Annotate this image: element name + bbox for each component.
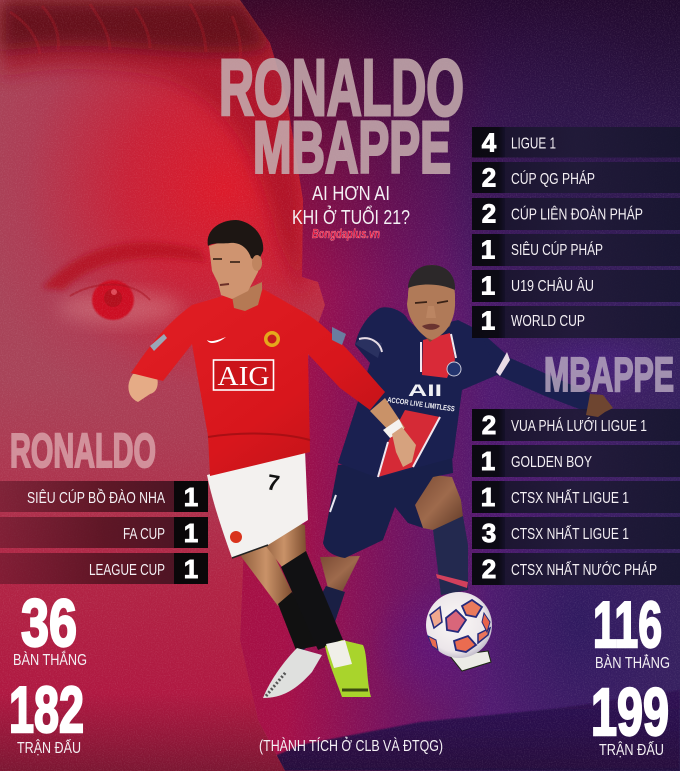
Ronaldo rear leg and white boot xyxy=(240,543,322,698)
Mbappe head xyxy=(407,265,455,340)
row: CTSX Nuoc Phap xyxy=(472,553,680,585)
Mbappe sock xyxy=(433,516,468,595)
footnote: (THÀNH TÍCH Ở CLB VÀ ĐTQG) xyxy=(259,737,443,755)
Ronaldo player cutout xyxy=(128,220,416,698)
row: World Cup: WORLD CUP xyxy=(511,313,585,330)
Ronaldo wristband xyxy=(383,419,404,438)
Manchester United crest xyxy=(264,331,280,347)
Ronaldo green boot xyxy=(325,640,371,697)
jersey sponsor: ACCOR LIVE LIMITLESS xyxy=(387,395,455,413)
row: Sieu Cup Bo Dao Nha: 1 xyxy=(184,482,198,512)
jersey sponsor xyxy=(387,381,455,413)
stat: Ronaldo goals: 36 xyxy=(21,586,77,661)
row: Golden Boy xyxy=(472,445,680,477)
stat: Mbappe matches: TRẬN ĐẤU xyxy=(599,742,664,759)
row: FA Cup: 1 xyxy=(184,518,198,548)
Mbappe right leg xyxy=(415,475,463,530)
Mbappe extended arm xyxy=(481,332,590,412)
Ronaldo black sock xyxy=(281,551,343,650)
source logo: Bongdaplus.vn xyxy=(312,227,380,241)
row: FA Cup: FA CUP xyxy=(123,526,165,543)
subtitle xyxy=(292,183,410,229)
row: U19 Chau Au xyxy=(472,270,680,302)
Ronaldo red jersey xyxy=(131,289,385,476)
stat: Ronaldo goals: BÀN THẮNG xyxy=(13,651,87,669)
Ronaldo forearm xyxy=(370,398,405,434)
Ronaldo left hand xyxy=(128,372,158,402)
Mbappe neck xyxy=(414,316,452,342)
row: Cup QG Phap: CÚP QG PHÁP xyxy=(511,171,595,188)
row: World Cup: 1 xyxy=(481,306,495,336)
row: Sieu Cup Phap: SIÊU CÚP PHÁP xyxy=(511,242,603,259)
row: Cup QG Phap: 2 xyxy=(482,162,496,192)
stat: Ronaldo matches xyxy=(9,673,84,757)
Mbappe sleeve cuff xyxy=(496,352,510,376)
Mbappe body jersey xyxy=(338,307,508,478)
Ronaldo shorts: 7 xyxy=(265,469,282,496)
jersey sponsor: AII xyxy=(408,381,442,400)
Mbappe hand xyxy=(586,394,613,417)
row: CTSX Ligue 1: 1 xyxy=(481,482,495,512)
row: League Cup: 1 xyxy=(184,554,198,584)
Ronaldo right hand xyxy=(392,427,416,467)
title xyxy=(219,43,464,188)
panel: Mbappe trophies xyxy=(472,127,680,338)
row: Cup Lien Doan Phap xyxy=(472,198,680,230)
row: CTSX Ligue 1 xyxy=(472,481,680,513)
Mbappe rear leg xyxy=(299,556,360,653)
row: CTSX Ligue 1 second xyxy=(472,517,680,549)
PSG red stripes xyxy=(422,333,455,378)
row: League Cup xyxy=(0,553,208,584)
Ronaldo shorts xyxy=(207,450,308,558)
row: Cup QG Phap xyxy=(472,162,680,193)
title: RONALDO xyxy=(219,43,464,132)
background portrait: Ronaldo face xyxy=(0,0,330,771)
stat: Ronaldo matches: 182 xyxy=(9,673,84,746)
row: U19 Chau Au: U19 CHÂU ÂU xyxy=(511,278,594,295)
row: Golden Boy: 1 xyxy=(481,446,495,476)
row: Ligue 1: LIGUE 1 xyxy=(511,136,556,152)
row: World Cup xyxy=(472,306,680,338)
row: League Cup: LEAGUE CUP xyxy=(89,562,165,579)
row: Cup Lien Doan Phap: CÚP LIÊN ĐOÀN PHÁP xyxy=(511,206,643,224)
row: CTSX Ligue 1: CTSX NHẤT LIGUE 1 xyxy=(511,490,629,507)
row: Golden Boy: GOLDEN BOY xyxy=(511,454,592,471)
row: U19 Chau Au: 1 xyxy=(481,270,495,300)
AIG sponsor: AIG xyxy=(218,361,270,391)
Mbappe player cutout xyxy=(299,265,590,653)
subtitle: KHI Ở TUỔI 21? xyxy=(292,205,410,229)
panel: Ronaldo trophies xyxy=(0,481,208,584)
Ronaldo head xyxy=(208,220,263,311)
Mbappe shorts xyxy=(323,455,453,558)
Ronaldo front leg xyxy=(262,515,306,567)
row: Cup Lien Doan Phap: 2 xyxy=(482,198,496,228)
row: Vua pha luoi: 2 xyxy=(482,410,496,440)
row: CTSX Nuoc Phap: 2 xyxy=(482,554,496,584)
row: Ligue 1 xyxy=(472,127,680,158)
row: CTSX Ligue 1 second: CTSX NHẤT LIGUE 1 xyxy=(511,526,629,543)
panel: Mbappe awards xyxy=(472,409,680,585)
subtitle: AI HƠN AI xyxy=(312,183,390,205)
row: Vua pha luoi xyxy=(472,409,680,441)
row: Sieu Cup Phap: 1 xyxy=(481,234,495,264)
heading: Ronaldo: RONALDO xyxy=(10,425,156,478)
football xyxy=(426,592,492,671)
Nike logo xyxy=(207,337,226,343)
row: Sieu Cup Phap xyxy=(472,234,680,266)
stat: Ronaldo matches: TRẬN ĐẤU xyxy=(17,740,81,757)
row: Ligue 1: 4 xyxy=(482,128,497,158)
title: MBAPPE xyxy=(253,108,451,188)
PSG crest xyxy=(447,362,461,376)
row: FA Cup xyxy=(0,517,208,548)
row: CTSX Ligue 1 second: 3 xyxy=(482,518,496,548)
row: Sieu Cup Bo Dao Nha xyxy=(0,481,208,512)
row: Sieu Cup Bo Dao Nha: SIÊU CÚP BỒ ĐÀO NHA xyxy=(27,489,166,507)
